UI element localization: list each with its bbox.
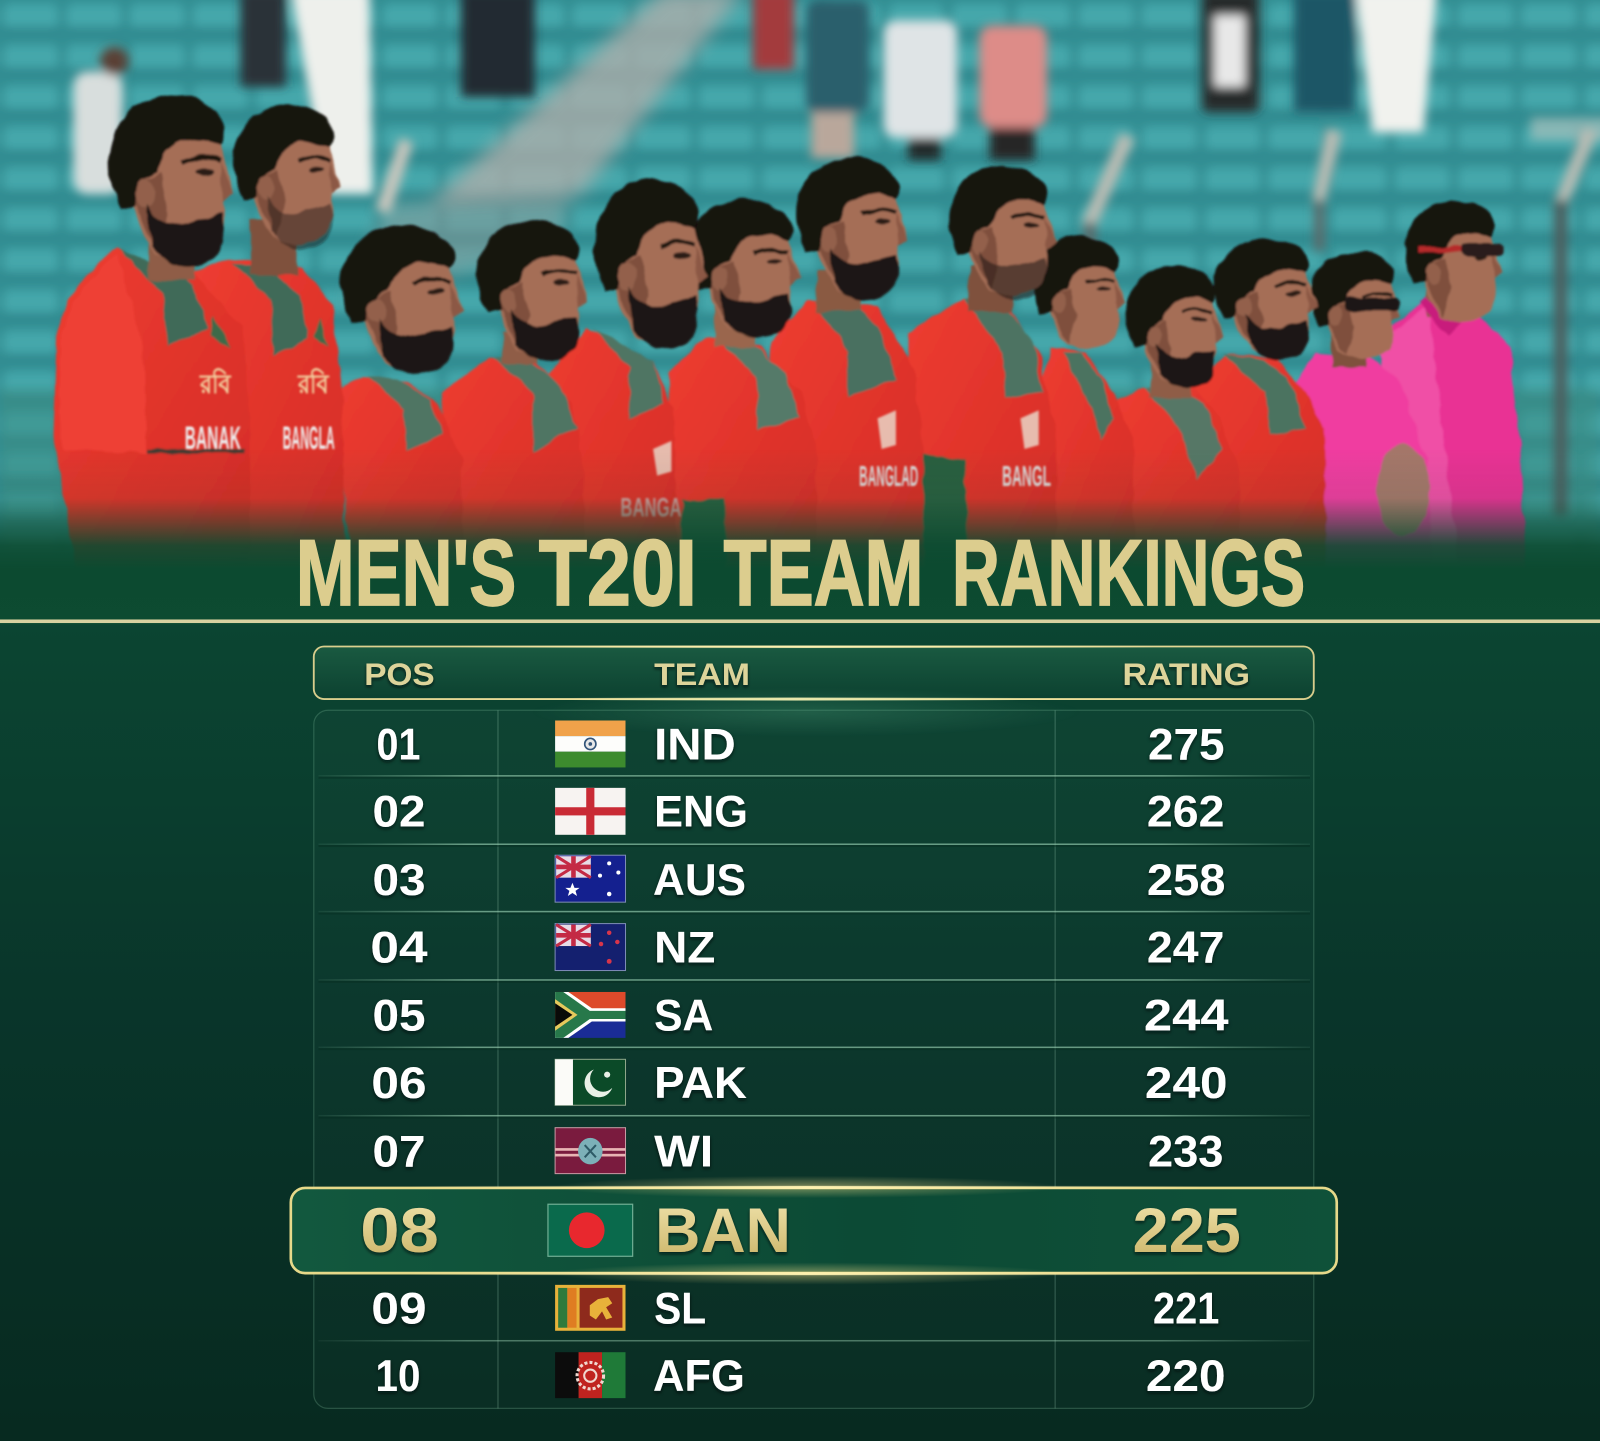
player 8 bbox=[906, 165, 1056, 572]
jersey sponsor marks bbox=[185, 367, 1051, 522]
row 06 PAK: 240 bbox=[1145, 1057, 1228, 1108]
header: pos: POS bbox=[364, 656, 435, 692]
title: T20I bbox=[539, 520, 697, 625]
jersey sponsor marks: রবি bbox=[297, 367, 330, 399]
flag: Sri Lanka bbox=[555, 1285, 626, 1331]
row 04 NZ: NZ bbox=[654, 921, 715, 972]
row 04 NZ: 04 bbox=[370, 921, 428, 972]
row 03 AUS bbox=[372, 854, 1226, 905]
highlighted row: Bangladesh bbox=[291, 1176, 1337, 1285]
jersey sponsor marks: BANGLAD bbox=[859, 461, 918, 493]
row 01 IND bbox=[377, 718, 1224, 769]
photo fade into green bbox=[0, 449, 1600, 625]
jersey sponsor marks: রবি bbox=[199, 367, 232, 399]
title: TEAM bbox=[723, 520, 923, 625]
row 09 SL: 221 bbox=[1153, 1283, 1219, 1334]
player 4 bbox=[441, 220, 587, 572]
player 5 bbox=[544, 178, 707, 572]
player 10 bbox=[1114, 265, 1240, 572]
highlighted rating: 225 bbox=[1133, 1196, 1241, 1266]
umpire left bbox=[1294, 252, 1434, 572]
player 2 bbox=[192, 104, 345, 572]
row 06 PAK: 06 bbox=[371, 1057, 427, 1108]
row 02 ENG: 262 bbox=[1147, 786, 1224, 837]
row 09 SL: SL bbox=[654, 1283, 706, 1334]
row 07 WI: 07 bbox=[372, 1125, 426, 1176]
row 10 AFG: AFG bbox=[653, 1350, 745, 1401]
row 07 WI: WI bbox=[654, 1125, 713, 1176]
flag: West Indies bbox=[555, 1128, 626, 1174]
player 9 bbox=[1032, 236, 1135, 572]
jersey sponsor marks: BANAK bbox=[185, 419, 241, 456]
table header bar bbox=[314, 645, 1314, 701]
stadium seats background bbox=[0, 0, 1600, 582]
row 10 AFG: 10 bbox=[376, 1350, 420, 1401]
highlighted position: 08 bbox=[360, 1196, 439, 1266]
row 02 ENG: 02 bbox=[372, 786, 426, 837]
flag: Bangladesh bbox=[548, 1204, 633, 1256]
row 03 AUS: AUS bbox=[653, 854, 746, 905]
row 10 AFG bbox=[376, 1350, 1226, 1401]
player 6 bbox=[668, 199, 816, 572]
row 07 WI bbox=[372, 1125, 1223, 1176]
row 03 AUS: 258 bbox=[1147, 854, 1226, 905]
row 04 NZ bbox=[370, 921, 1224, 972]
title: MEN'S bbox=[296, 520, 516, 625]
highlighted team: BAN bbox=[655, 1196, 791, 1266]
flag: England bbox=[555, 788, 626, 835]
title: RANKINGS bbox=[952, 520, 1305, 625]
player 11 bbox=[1189, 239, 1327, 572]
player 7 bbox=[770, 157, 923, 572]
umpire right bbox=[1378, 201, 1526, 572]
player 3 bbox=[334, 225, 464, 572]
row 09 SL bbox=[371, 1283, 1219, 1334]
flag: New Zealand bbox=[555, 924, 626, 971]
photo: team lineup bbox=[0, 0, 1600, 625]
row 01 IND: 01 bbox=[377, 718, 420, 769]
jersey sponsor marks: BANGLA bbox=[283, 419, 335, 456]
row 06 PAK bbox=[371, 1057, 1228, 1108]
row 05 SA: 244 bbox=[1144, 990, 1229, 1041]
flag: Afghanistan bbox=[555, 1352, 626, 1398]
title divider line bbox=[0, 619, 1600, 623]
players group bbox=[53, 94, 1526, 572]
row 10 AFG: 220 bbox=[1146, 1350, 1226, 1401]
flag: Pakistan bbox=[555, 1059, 626, 1105]
flag: India bbox=[555, 720, 626, 767]
rankings table panel bbox=[314, 688, 1314, 1408]
row 06 PAK: PAK bbox=[654, 1057, 747, 1108]
row 04 NZ: 247 bbox=[1147, 921, 1224, 972]
row 07 WI: 233 bbox=[1148, 1125, 1223, 1176]
row 01 IND: IND bbox=[654, 718, 736, 769]
row 01 IND: 275 bbox=[1148, 718, 1224, 769]
blurred stairs, spectators and fence bbox=[347, 0, 745, 306]
header: team: TEAM bbox=[654, 656, 750, 692]
row 03 AUS: 03 bbox=[372, 854, 426, 905]
player 1 bbox=[53, 94, 250, 572]
row 02 ENG bbox=[372, 786, 1224, 837]
row 09 SL: 09 bbox=[371, 1283, 427, 1334]
row 05 SA: 05 bbox=[372, 990, 426, 1041]
row 05 SA: SA bbox=[654, 990, 713, 1041]
photo: team lineup: BANGL bbox=[1002, 461, 1051, 493]
jersey sponsor marks: BANGA bbox=[620, 492, 682, 522]
title bbox=[296, 520, 1305, 625]
row 02 ENG: ENG bbox=[654, 786, 748, 837]
header: rating: RATING bbox=[1122, 656, 1250, 692]
flag: Australia bbox=[555, 855, 626, 902]
flag: South Africa bbox=[555, 992, 626, 1038]
row 05 SA bbox=[372, 990, 1229, 1041]
